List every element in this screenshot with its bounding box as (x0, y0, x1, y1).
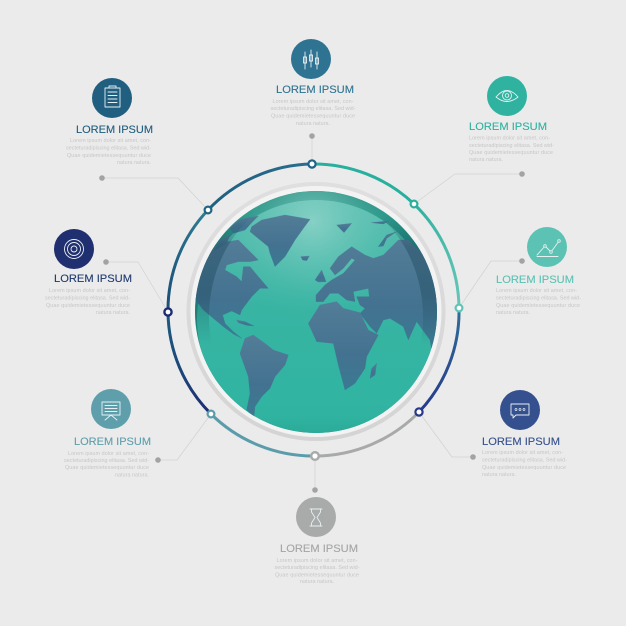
text block: Quae quidemietessequuntur duce (67, 153, 151, 159)
text block: Lorem ipsum dolor sit amet, con- (496, 288, 577, 294)
glass shading (195, 223, 437, 334)
text block: Quae quidemietessequuntur duce (275, 572, 359, 578)
icon: hourglass (296, 497, 336, 537)
text block: natura natura. (300, 579, 334, 585)
text block: Lorem ipsum dolor sit amet, con- (49, 288, 130, 294)
icon: presentation board (91, 389, 131, 429)
heading: LOREM IPSUM (276, 84, 354, 96)
text block: Lorem ipsum dolor sit amet, con- (68, 451, 149, 457)
heading: LOREM IPSUM (76, 124, 153, 136)
panel: top left (66, 78, 153, 166)
panel: bottom right (482, 390, 567, 478)
text block: natura natura. (115, 472, 149, 478)
text block: Quae quidemietessequuntur duce (482, 465, 566, 471)
panel: bottom left (64, 389, 151, 478)
text block: Quae quidemietessequuntur duce (496, 303, 580, 309)
text block: Quae quidemietessequuntur duce (469, 150, 553, 156)
text block (274, 558, 360, 585)
text block: secteturadipiscing elitasa. Sed wid- (496, 296, 581, 302)
text block: natura natura. (117, 160, 151, 166)
text block: Lorem ipsum dolor sit amet, con- (70, 138, 151, 144)
text block (482, 450, 567, 478)
text block: Quae quidemietessequuntur duce (271, 114, 355, 120)
icon: clipboard (92, 78, 132, 118)
text block: Lorem ipsum dolor sit amet, con- (272, 99, 354, 105)
text block: Lorem ipsum dolor sit amet, con- (482, 450, 563, 456)
icon: line chart (527, 227, 567, 267)
text block (469, 136, 554, 163)
heading: LOREM IPSUM (496, 274, 574, 286)
text block: natura natura. (496, 310, 530, 316)
text block (45, 288, 130, 316)
text block: Lorem ipsum dolor sit amet, con- (276, 558, 358, 564)
heading: LOREM IPSUM (54, 273, 132, 285)
text block: secteturadipiscing elitasa. Sed wid- (482, 458, 567, 464)
text block: natura natura. (469, 157, 503, 163)
icon: eye (487, 76, 527, 116)
panel: top (270, 39, 356, 127)
panel: left (45, 229, 132, 316)
text block: Quae quidemietessequuntur duce (65, 465, 149, 471)
panel: bottom (274, 497, 360, 585)
panel: top right (469, 76, 554, 163)
text block: secteturadipiscing elitasa. Sed wid- (270, 106, 356, 112)
heading: LOREM IPSUM (482, 436, 560, 448)
text block (496, 288, 581, 316)
text block: natura natura. (96, 310, 130, 316)
text block: secteturadipiscing elitasa. Sed wid- (66, 146, 151, 152)
text block (66, 138, 151, 166)
text block (64, 451, 149, 478)
globe with rim (186, 182, 446, 442)
icon: speech bubble (500, 390, 540, 430)
panel: right (496, 227, 581, 316)
text block: secteturadipiscing elitasa. Sed wid- (274, 565, 360, 571)
circular ring segments (164, 160, 462, 460)
heading: LOREM IPSUM (469, 121, 547, 133)
heading: LOREM IPSUM (280, 543, 358, 555)
text block: Quae quidemietessequuntur duce (46, 303, 130, 309)
icon: disc (54, 229, 94, 269)
text block: secteturadipiscing elitasa. Sed wid- (469, 143, 554, 149)
text block: natura natura. (482, 472, 516, 478)
text block: secteturadipiscing elitasa. Sed wid- (45, 296, 130, 302)
text block: natura natura. (296, 121, 330, 127)
world map (192, 215, 443, 417)
text block: secteturadipiscing elitasa. Sed wid- (64, 458, 149, 464)
text block: Lorem ipsum dolor sit amet, con- (469, 136, 550, 142)
icon: sliders (291, 39, 331, 79)
text block (270, 99, 356, 127)
connector lines (99, 133, 525, 493)
heading: LOREM IPSUM (74, 436, 151, 448)
